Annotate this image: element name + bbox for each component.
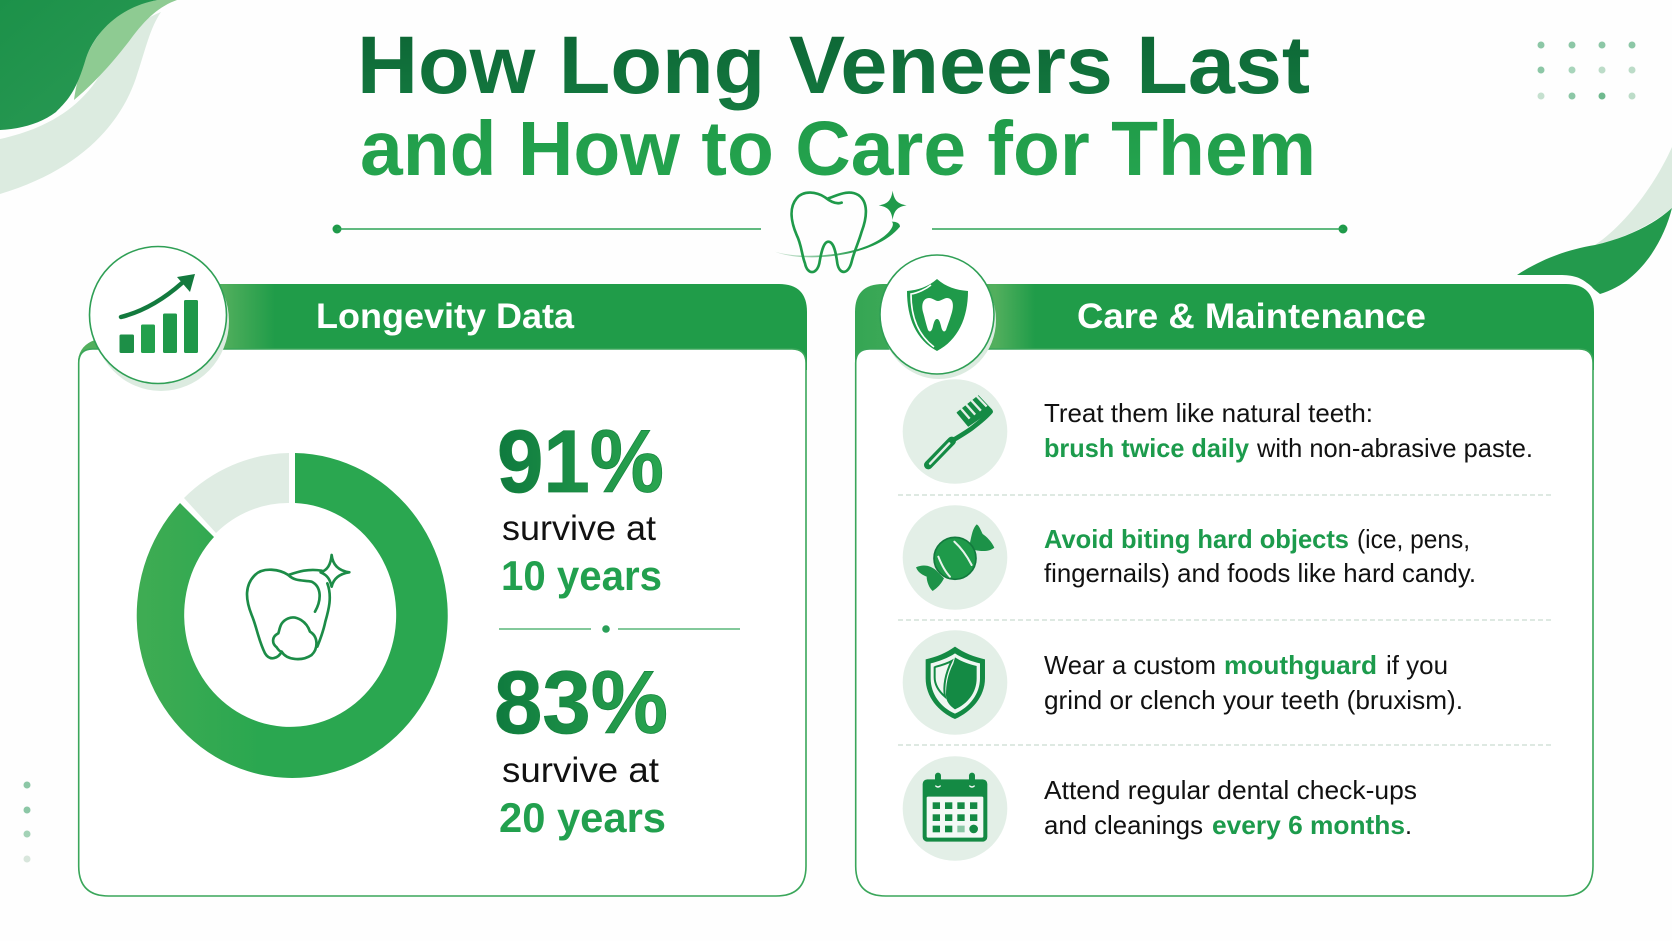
decoration: top-right dot grid [1538,42,1636,100]
stat: 83 percent at 20 years: 83% [494,652,668,752]
text: custom mouthguard: if you [1386,650,1448,680]
stat: 91 percent at 10 years [497,411,664,599]
icon badge: shield with tooth [880,255,996,379]
icon badge: rising bar chart [90,246,229,391]
row: check-ups [903,756,1417,861]
donut chart [137,453,448,778]
row: brush [903,379,1533,484]
title [357,20,1316,192]
divider with tooth emblem [332,191,1348,272]
title line 2: and How to Care for Them [360,106,1316,192]
text: brush twice daily: with non-abrasive paste. [1256,433,1533,463]
panel header: care and maintenance [849,278,1600,370]
text: avoid biting hard objects: (ice, pens, [1357,524,1470,554]
text: avoid biting hard objects: fingernails) and foods like hard candy. [1044,558,1476,588]
stat: 91 percent at 10 years: 10 years [501,552,662,599]
text: brush twice daily [1044,398,1533,463]
icon: tooth in donut [247,555,349,659]
icon: candy [903,505,1007,610]
donut segment: remainder [184,453,289,533]
stat: 83 percent at 20 years: 20 years [499,794,666,841]
donut segment: survival share [137,453,448,778]
icon: tooth with sparkle [775,191,907,272]
stat divider [499,625,740,633]
text: custom mouthguard: mouthguard [1224,650,1377,680]
icon: toothbrush [903,379,1007,484]
stat: 83 percent at 20 years: survive at [502,751,659,790]
text: regular check-ups: and cleanings [1044,810,1203,840]
panel header: longevity data [78,284,807,370]
text: regular check-ups: Attend regular dental check-ups [1044,775,1417,805]
stat: 83 percent at 20 years [494,652,668,841]
text: regular check-ups: every 6 months [1212,810,1405,840]
text: custom mouthguard: Wear a custom [1044,650,1216,680]
stat: 91 percent at 10 years: 91% [497,411,664,511]
text: brush twice daily: brush twice daily [1044,433,1250,463]
row: hard objects [903,505,1476,610]
stat: 91 percent at 10 years: survive at [502,509,656,548]
panel: longevity data [78,246,807,896]
panel header: longevity data: Longevity Data [316,297,575,336]
decoration: right leaf [1517,147,1672,294]
title line 1: How Long Veneers Last [357,20,1310,111]
panel: care and maintenance [849,255,1600,896]
decoration: left dots [24,782,30,862]
text: avoid biting hard objects: Avoid biting hard objects [1044,524,1349,554]
icon: calendar [903,756,1007,861]
panel header: care and maintenance: Care & Maintenance [1077,297,1426,336]
text: regular check-ups [1044,775,1417,840]
text: brush twice daily: Treat them like natural teeth: [1044,398,1373,428]
text: avoid biting hard objects [1044,524,1476,588]
panel body: longevity data [79,349,806,896]
icon: shield [903,630,1007,735]
row: mouthguard [903,630,1463,735]
text: custom mouthguard: grind or clench your teeth (bruxism). [1044,685,1463,715]
text: custom mouthguard [1044,650,1463,715]
panel body: care and maintenance [856,349,1593,896]
text: regular check-ups: . [1405,810,1412,840]
decoration: top-left leaf [0,0,177,194]
